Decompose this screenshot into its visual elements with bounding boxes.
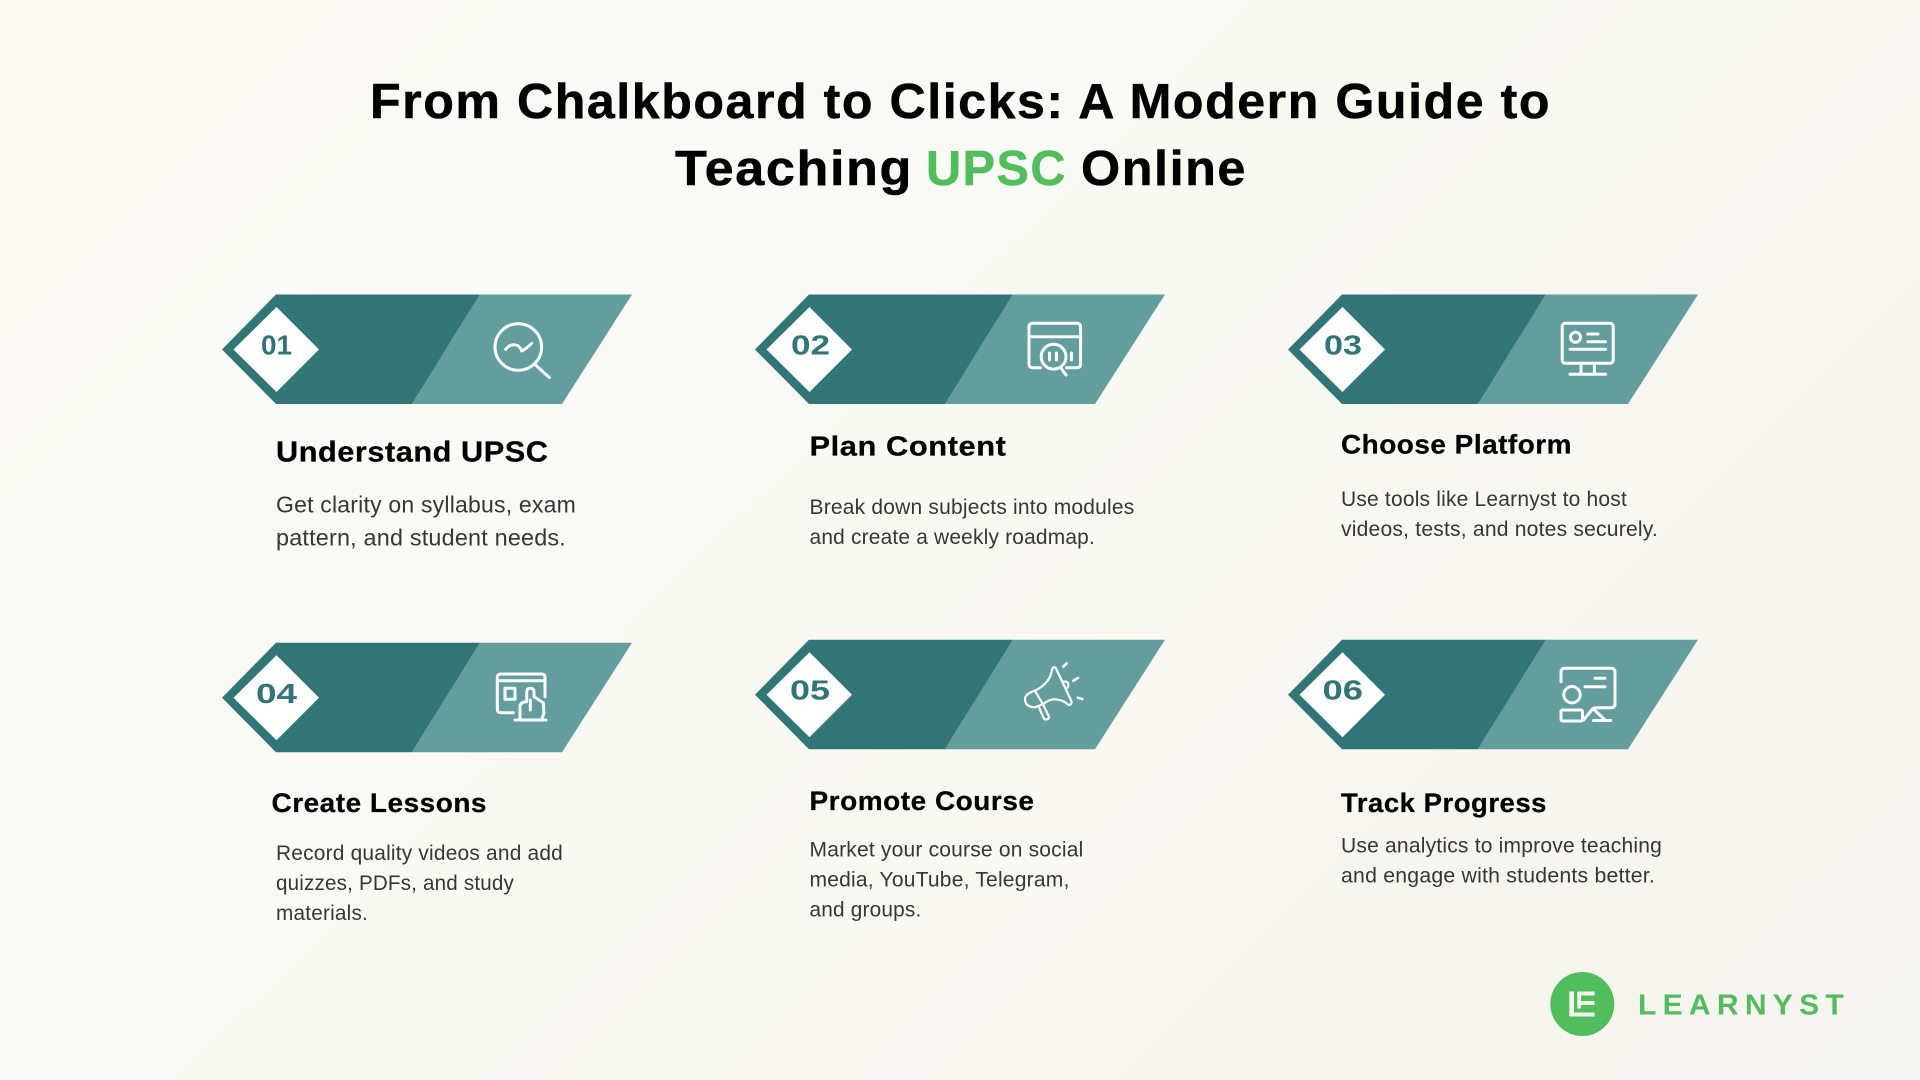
- description 1: [276, 492, 576, 551]
- description 3: videos, tests, and notes securely.: [1341, 517, 1658, 541]
- description 3: Use tools like Learnyst to host: [1341, 487, 1627, 511]
- number 05: 05: [790, 675, 830, 706]
- description 2: Break down subjects into modules: [810, 495, 1134, 519]
- description 1: Get clarity on syllabus, exam: [276, 492, 576, 518]
- banner 02: [755, 294, 1165, 404]
- number 01: 01: [261, 330, 292, 361]
- icon: presenter at board: [1561, 668, 1615, 721]
- panel: step 6 track progress: [1288, 640, 1698, 888]
- title: From Chalkboard to Clicks: A Modern Guide to: [370, 75, 1551, 129]
- title: Online: [1081, 142, 1247, 196]
- panel: step 2 plan content: [755, 294, 1165, 549]
- banner 03: [1288, 294, 1698, 404]
- banner 04: [222, 643, 632, 752]
- panel: step 5 promote course: [755, 640, 1165, 922]
- logo: Learnyst: [1550, 972, 1850, 1036]
- number 03: 03: [1324, 330, 1362, 361]
- title: Teaching: [675, 142, 913, 196]
- description 5: Market your course on social: [810, 838, 1084, 862]
- description 6: Use analytics to improve teaching: [1341, 834, 1662, 858]
- description 2: [810, 495, 1134, 549]
- heading: Plan Content: Plan Content: [810, 431, 1006, 462]
- icon: megaphone: [1025, 663, 1082, 719]
- logo mark: [1550, 972, 1614, 1036]
- title: UPSC: [926, 142, 1067, 196]
- heading: Promote Course: Promote Course: [810, 786, 1034, 816]
- icon: window with pointing hand: [497, 674, 546, 720]
- wordmark: LEARNYST: [1638, 990, 1850, 1022]
- banner 05: [755, 640, 1165, 749]
- panel: step 4 create lessons: [222, 643, 632, 925]
- description 6: [1341, 834, 1662, 888]
- description 1: pattern, and student needs.: [276, 525, 566, 551]
- banner 01: [222, 294, 632, 404]
- number 02: 02: [791, 330, 830, 361]
- heading: Choose Platform: Choose Platform: [1341, 430, 1572, 460]
- description 4: Record quality videos and add: [276, 841, 563, 865]
- description 2: and create a weekly roadmap.: [810, 525, 1095, 549]
- title: [370, 75, 1551, 196]
- description 5: [810, 838, 1084, 922]
- heading: Create Lessons: Create Lessons: [272, 788, 487, 818]
- description 4: materials.: [276, 901, 368, 925]
- description 5: media, YouTube, Telegram,: [810, 868, 1070, 892]
- panel: step 3 choose platform: [1288, 294, 1698, 541]
- icon: magnifier with trend line: [495, 324, 549, 378]
- number 06: 06: [1322, 675, 1363, 706]
- heading: Track Progress: Track Progress: [1341, 788, 1547, 818]
- description 6: and engage with students better.: [1341, 864, 1655, 888]
- description 4: [276, 841, 563, 925]
- description 4: quizzes, PDFs, and study: [276, 871, 514, 895]
- number 04: 04: [256, 678, 298, 709]
- heading: Understand UPSC: Understand UPSC: [276, 437, 548, 469]
- icon: monitor dashboard: [1562, 323, 1613, 374]
- description 5: and groups.: [810, 898, 922, 922]
- description 3: [1341, 487, 1658, 541]
- panel: step 1 understand UPSC: [222, 294, 632, 551]
- icon: browser window with magnifier: [1029, 323, 1081, 375]
- banner 06: [1288, 640, 1698, 749]
